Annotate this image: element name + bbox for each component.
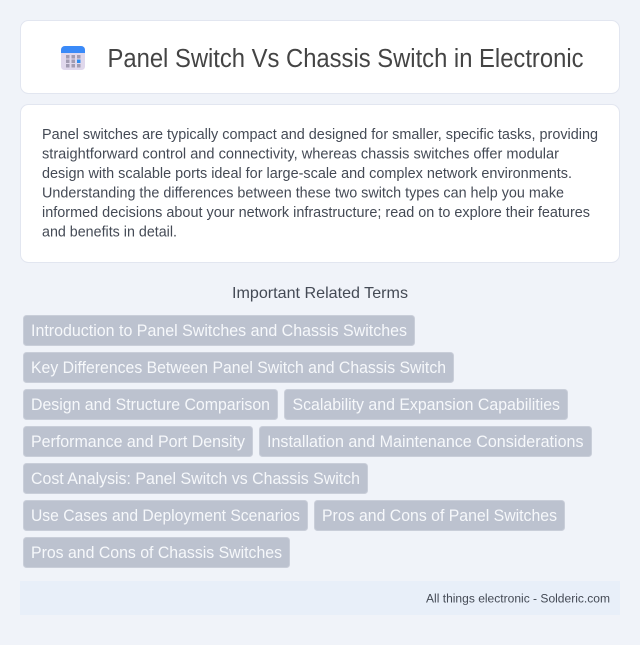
tag: scalability: Scalability and Expansion Capabilities xyxy=(292,396,560,414)
tag list: related terms xyxy=(24,316,592,568)
tag: pros and cons panel xyxy=(314,500,564,530)
tag: design and structure: Design and Structure Comparison xyxy=(31,396,270,414)
tag: cost analysis: Cost Analysis: Panel Switch vs Chassis Switch xyxy=(31,470,360,488)
tag: cost analysis xyxy=(24,464,368,494)
tag: design and structure xyxy=(24,390,278,420)
footer credit: All things electronic - Solderic.com xyxy=(426,592,610,606)
tag: key differences: Key Differences Between Panel Switch and Chassis Switch xyxy=(31,359,446,377)
tag: use cases: Use Cases and Deployment Scenarios xyxy=(31,507,300,525)
panel: title header xyxy=(20,20,620,94)
tag: scalability xyxy=(284,390,568,420)
tag: pros and cons chassis: Pros and Cons of Chassis Switches xyxy=(31,544,282,562)
panel: introduction xyxy=(20,104,620,262)
tag: installation xyxy=(260,426,592,456)
tag: performance xyxy=(24,426,252,456)
text block: introduction paragraph xyxy=(42,127,598,240)
tag: key differences xyxy=(24,352,454,382)
tag: installation: Installation and Maintenance Considerations xyxy=(267,433,584,451)
tag: pros and cons panel: Pros and Cons of Panel Switches xyxy=(322,507,557,525)
text block: introduction paragraph: design with scalable ports ideal for large-scale and complex network environments. xyxy=(42,166,572,182)
text block: introduction paragraph: and benefits in detail. xyxy=(42,224,177,240)
text block: introduction paragraph: Panel switches are typically compact and designed for smaller, specific tasks, providing xyxy=(42,127,598,143)
footer xyxy=(20,581,620,615)
text block: introduction paragraph: informed decisions about your network infrastructure; read on to explore their features xyxy=(42,205,590,221)
tag: introduction xyxy=(24,316,414,346)
icon: calendar grid xyxy=(61,46,85,70)
heading: important related terms: Important Related Terms xyxy=(232,285,408,302)
title: Panel Switch Vs Chassis Switch in Electronic xyxy=(108,45,584,73)
text block: introduction paragraph: Understanding the differences between these two switch types can help you make xyxy=(42,186,564,202)
text block: introduction paragraph: straightforward control and connectivity, whereas chassis switches offer modular xyxy=(42,146,559,162)
tag: performance: Performance and Port Density xyxy=(31,433,246,451)
tag: use cases xyxy=(24,500,308,530)
tag: pros and cons chassis xyxy=(24,538,290,568)
tag: introduction: Introduction to Panel Switches and Chassis Switches xyxy=(31,322,407,340)
